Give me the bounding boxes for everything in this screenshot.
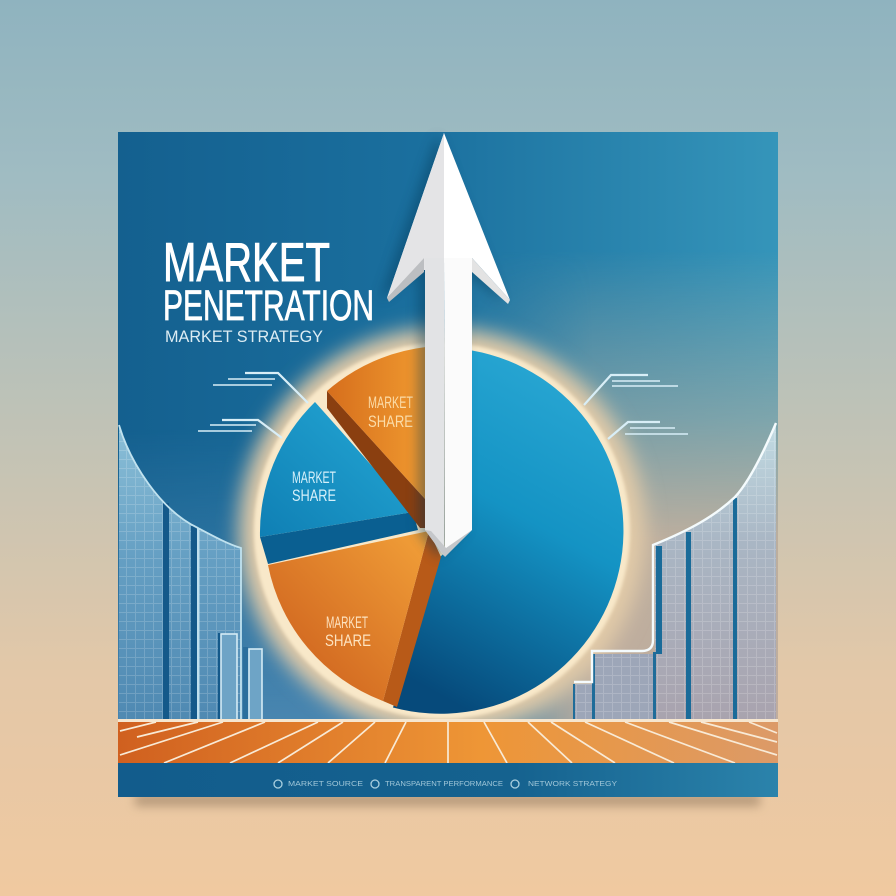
footer item 3: NETWORK STRATEGY — [528, 781, 617, 788]
slice: top orange — [327, 347, 426, 500]
title block — [163, 231, 374, 346]
title block: MARKET — [163, 231, 330, 293]
left buildings — [119, 425, 262, 720]
title block: MARKET STRATEGY — [165, 328, 323, 346]
slice side: blue edge — [260, 512, 418, 564]
perspective floor — [118, 719, 778, 763]
arrow shaft — [444, 258, 472, 556]
growth arrow — [380, 133, 510, 558]
slice side: top orange edge — [327, 391, 426, 528]
label: blue — [292, 468, 336, 505]
label: top orange — [368, 393, 413, 431]
slice: blue — [260, 402, 413, 537]
label: top orange: MARKET — [368, 393, 413, 412]
footer item 1: MARKET SOURCE — [288, 781, 363, 788]
main panel — [118, 132, 778, 719]
slice: lower orange — [268, 531, 429, 701]
footer item 3 — [511, 780, 617, 788]
footer item 2: TRANSPARENT PERFORMANCE — [385, 781, 503, 788]
label: top orange: SHARE — [368, 412, 413, 431]
label: lower orange: SHARE — [325, 631, 371, 650]
footer band — [118, 763, 778, 797]
callout lines — [198, 373, 688, 439]
arrow head — [387, 133, 510, 300]
pie chart — [260, 347, 623, 714]
title block: PENETRATION — [163, 282, 374, 330]
label: lower orange — [325, 613, 371, 650]
slice side: lower orange edge — [383, 531, 441, 707]
pie glow — [239, 328, 645, 734]
panel shadow — [135, 794, 760, 806]
footer item 1 — [274, 780, 363, 788]
label: blue: SHARE — [292, 486, 336, 505]
label: blue: MARKET — [292, 468, 336, 487]
slice: large blue — [393, 350, 623, 714]
right buildings — [573, 423, 776, 720]
label: lower orange: MARKET — [326, 613, 368, 632]
